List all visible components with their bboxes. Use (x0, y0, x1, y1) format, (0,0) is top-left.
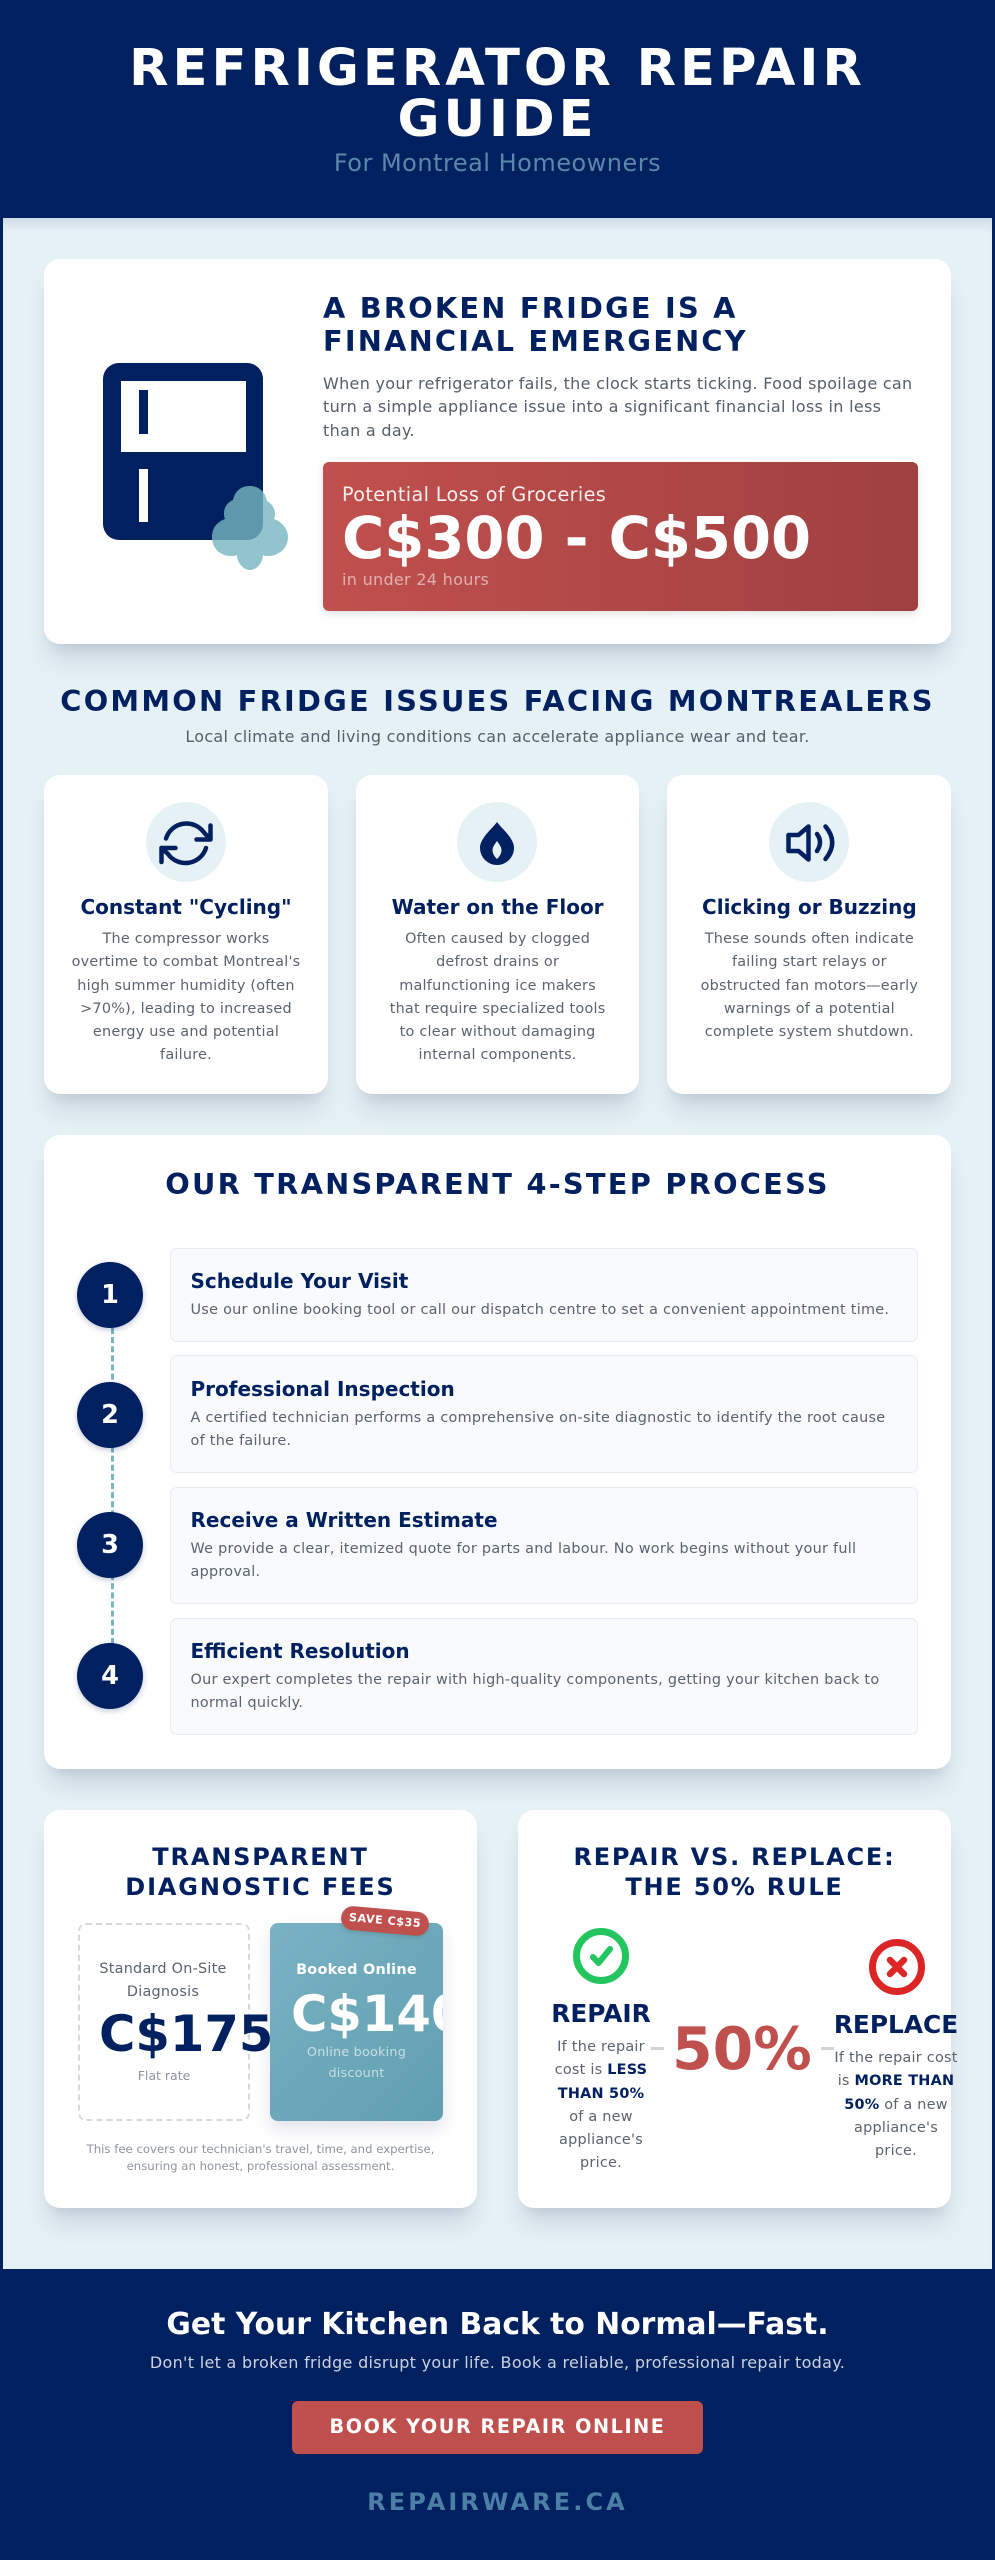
step 4 number (77, 1643, 143, 1709)
intro paragraph: When your refrigerator fails, the clock starts ticking. Food spoilage can (323, 374, 912, 393)
repair text: THAN 50% (558, 2086, 644, 2102)
step 2 text (190, 1410, 885, 1449)
replace title: REPLACE (834, 2010, 958, 2039)
card text: water: malfunctioning ice makers (399, 978, 596, 994)
replace text: 50% of a new (844, 2097, 948, 2113)
heading: 50% rule: REPAIR VS. REPLACE: (573, 1843, 896, 1871)
card text: cycling: energy use and potential (93, 1024, 279, 1040)
heading: process: OUR TRANSPARENT 4-STEP PROCESS (165, 1167, 830, 1201)
booked online note: Online booking (307, 2045, 406, 2060)
step 2 number: 2 (101, 1400, 119, 1430)
subtitle: For Montreal Homeowners (334, 149, 661, 177)
repair title: REPAIR (551, 1999, 651, 2028)
step 3 title: Receive a Written Estimate (190, 1508, 498, 1532)
replace text (834, 2050, 958, 2159)
replace text: appliance's (854, 2120, 938, 2136)
heading: diagnostic fees: TRANSPARENT (152, 1843, 369, 1871)
repair text: If the repair (557, 2039, 645, 2055)
timeline connector (110, 1328, 114, 1644)
call to action button: BOOK YOUR REPAIR ONLINE (330, 2415, 666, 2438)
repair text: price. (580, 2155, 622, 2171)
footer subtitle: Don't let a broken fridge disrupt your life. Book a reliable, professional repair today. (150, 2353, 845, 2372)
booked online fee box (270, 1923, 443, 2121)
panel: constant cycling (44, 775, 328, 1094)
card text: buzzing (701, 931, 918, 1040)
card text: cycling: failure. (160, 1047, 212, 1063)
icon: fridge with water puddle (103, 363, 288, 570)
call to action button (292, 2401, 703, 2454)
callout: potential loss (323, 462, 918, 611)
intro paragraph: turn a simple appliance issue into a significant financial loss in less (323, 397, 881, 416)
icon: x (869, 1939, 925, 1995)
callout label: Potential Loss of Groceries (342, 483, 606, 506)
booked online note (307, 2045, 406, 2080)
repair text: cost is LESS (555, 2062, 647, 2078)
standard fee label (99, 1961, 227, 2000)
icon: cycling arrows (146, 802, 226, 882)
main background panel (3, 218, 992, 2269)
panel: clicking or buzzing (667, 775, 951, 1094)
step 1 number (77, 1262, 143, 1328)
intro paragraph: than a day. (323, 421, 415, 440)
card text: cycling: overtime to combat Montreal's (72, 954, 300, 970)
repair text: appliance's (559, 2132, 643, 2148)
savings badge: SAVE C$35 (349, 1911, 422, 1930)
website: REPAIRWARE.CA (367, 2488, 628, 2516)
step 1 text: Use our online booking tool or call our dispatch centre to set a convenient appointment time. (190, 1302, 889, 1318)
heading: 50% rule (573, 1843, 896, 1901)
replace text: price. (875, 2143, 917, 2159)
step 2 text: A certified technician performs a comprehensive on-site diagnostic to identify the root cause (190, 1410, 885, 1426)
panel: 50% rule (518, 1810, 951, 2208)
title: REFRIGERATOR REPAIR (129, 38, 866, 98)
standard fee note: Flat rate (138, 2068, 190, 2083)
heading: financial emergency: FINANCIAL EMERGENCY (323, 324, 748, 358)
card text: cycling: The compressor works (102, 931, 270, 947)
step 4 box (170, 1618, 918, 1735)
subheading: common issues: Local climate and living conditions can accelerate appliance wear and tear. (185, 727, 810, 746)
card text: buzzing: obstructed fan motors—early (701, 978, 918, 994)
panel: process (44, 1135, 951, 1769)
replace text: is MORE THAN (838, 2073, 954, 2089)
step 2 box (170, 1355, 918, 1473)
standard fee label: Standard On-Site (99, 1961, 227, 1977)
panel: water on the floor (356, 775, 639, 1094)
card text: cycling: >70%), leading to increased (80, 1001, 292, 1017)
heading: diagnostic fees: DIAGNOSTIC FEES (125, 1873, 396, 1901)
card text: buzzing: These sounds often indicate (705, 931, 914, 947)
replace text: If the repair cost (834, 2050, 958, 2066)
panel: diagnostic fees (44, 1810, 477, 2208)
heading: financial emergency: A BROKEN FRIDGE IS A (323, 291, 738, 325)
card text: buzzing: warnings of a potential (724, 1001, 895, 1017)
heading: 50% rule: THE 50% RULE (625, 1873, 844, 1901)
icon: speaker (769, 802, 849, 882)
card text: buzzing: failing start relays or (732, 954, 887, 970)
step 1 number: 1 (101, 1280, 119, 1310)
step 2 title: Professional Inspection (190, 1377, 455, 1401)
card text: buzzing: complete system shutdown. (705, 1024, 914, 1040)
intro paragraph (323, 374, 912, 440)
card text: water: Often caused by clogged (405, 931, 590, 947)
step 4 text (190, 1672, 879, 1711)
step 4 text: normal quickly. (190, 1695, 303, 1711)
card text: cycling: high summer humidity (often (77, 978, 295, 994)
repair text (555, 2039, 647, 2171)
card title: buzzing: Clicking or Buzzing (702, 895, 917, 919)
step 4 number: 4 (101, 1661, 119, 1691)
savings badge (340, 1905, 430, 1937)
callout time: in under 24 hours (342, 570, 489, 589)
step 4 title: Efficient Resolution (190, 1639, 410, 1663)
fee footnote: This fee covers our technician's travel, time, and expertise, (87, 2142, 434, 2156)
card title: cycling: Constant "Cycling" (80, 895, 292, 919)
fee footnote (86, 2142, 434, 2173)
step 3 box (170, 1487, 918, 1604)
card text: water: that require specialized tools (390, 1001, 606, 1017)
icon: water drop (457, 802, 537, 882)
booked online label: Booked Online (296, 1962, 417, 1978)
footer band (0, 2269, 995, 2560)
standard fee label: Diagnosis (127, 1984, 199, 2000)
card text: water: internal components. (419, 1047, 577, 1063)
title: GUIDE (397, 89, 598, 149)
fee footnote: ensuring an honest, professional assessment. (127, 2159, 394, 2173)
step 3 number (77, 1512, 143, 1578)
dash left (651, 2047, 664, 2050)
title (129, 38, 866, 149)
card text: cycling (72, 931, 300, 1063)
step 3 text (190, 1541, 856, 1580)
booked online note: discount (328, 2066, 385, 2080)
standard fee price: C$175 (99, 2005, 273, 2063)
step 2 number (77, 1382, 143, 1448)
step 3 text: approval. (190, 1564, 260, 1580)
step 3 text: We provide a clear, itemized quote for parts and labour. No work begins without your full (190, 1541, 856, 1557)
heading: common issues: COMMON FRIDGE ISSUES FACING MONTREALERS (60, 684, 935, 718)
card text: water: defrost drains or (436, 954, 559, 970)
footer title: Get Your Kitchen Back to Normal—Fast. (166, 2307, 829, 2342)
heading: diagnostic fees (125, 1843, 396, 1901)
card text: water: to clear without damaging (400, 1024, 596, 1040)
step 4 text: Our expert completes the repair with high-quality components, getting your kitchen back to (190, 1672, 879, 1688)
card title: water: Water on the Floor (392, 895, 604, 919)
card text: water (390, 931, 606, 1063)
step 3 number: 3 (101, 1530, 119, 1560)
heading: financial emergency (323, 291, 748, 358)
step 1 title: Schedule Your Visit (190, 1269, 408, 1293)
step 2 text: of the failure. (190, 1433, 291, 1449)
panel: financial emergency (44, 259, 951, 644)
repair text: of a new (569, 2109, 633, 2125)
dash right (821, 2047, 834, 2050)
step 1 box (170, 1248, 918, 1342)
callout amount: C$300 - C$500 (342, 505, 811, 572)
header band (0, 0, 995, 218)
standard fee box (78, 1923, 250, 2121)
icon: check (573, 1928, 629, 1984)
big 50 percent: 50% (672, 2015, 812, 2083)
